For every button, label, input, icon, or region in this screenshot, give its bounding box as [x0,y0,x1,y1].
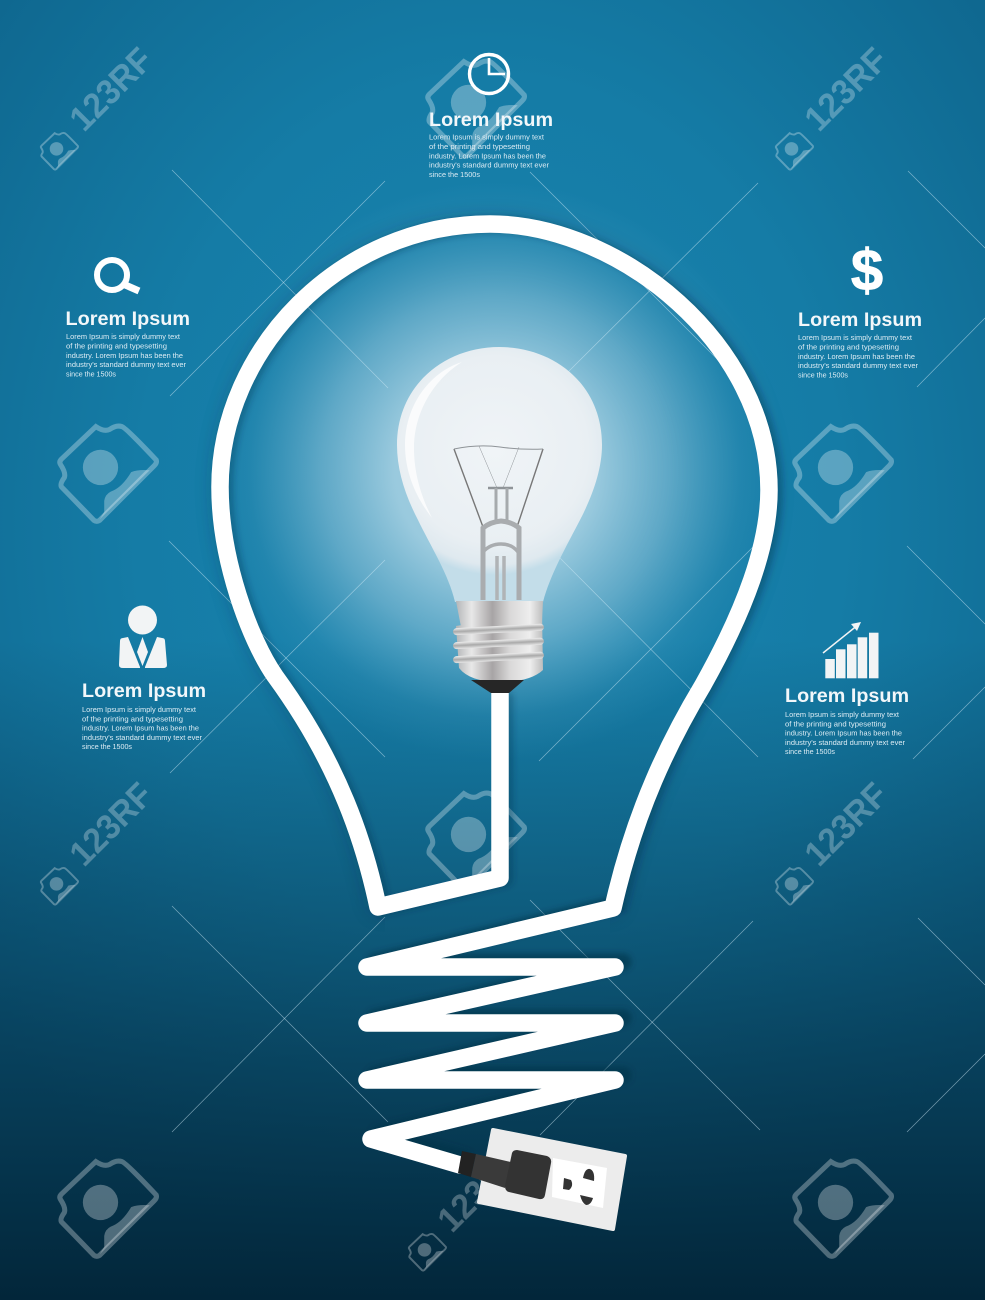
block: left magnifier: of the printing and typesetting [66,342,167,350]
plug body [471,1154,515,1188]
glass envelope [397,347,602,602]
screw base [453,601,544,682]
block: left person: Lorem Ipsum is simply dummy text [82,705,197,714]
block: left magnifier [66,260,190,378]
block: right chart [785,622,909,756]
block: right chart: Lorem Ipsum is simply dummy text [785,710,900,719]
block: top clock [429,54,553,179]
glass light bulb [397,347,602,693]
block: right chart: industry's standard dummy text ever [785,738,905,747]
plug head [505,1150,551,1199]
block: top clock: of the printing and typesetting [429,142,530,151]
block: right dollar: industry. Lorem Ipsum has been the [798,352,915,361]
block: left person: industry's standard dummy text ever [82,733,202,742]
block: right chart: of the printing and typesetting [785,719,886,728]
block: left person [82,606,206,751]
watermark: 123RF logos: 123RF [430,1141,528,1240]
block: right dollar: of the printing and typesetting [798,342,899,352]
block: right dollar: since the 1500s [798,370,848,380]
watermark: large stamps [60,61,891,1256]
icon: clock [470,54,508,94]
socket holes [563,1169,594,1205]
icon: business person [119,606,167,668]
block: left person: Lorem Ipsum [82,680,206,702]
glass highlight [405,362,462,518]
block: left magnifier: industry. Lorem Ipsum has been the [66,351,183,360]
block: left person: since the 1500s [82,742,132,751]
glow behind bulb [205,180,785,760]
socket plate [479,1130,625,1229]
block: left magnifier: Lorem Ipsum is simply dummy text [66,332,181,341]
block: top clock: Lorem Ipsum is simply dummy text [429,132,545,142]
block: right dollar: Lorem Ipsum [798,309,922,331]
block: right dollar [798,238,922,380]
block: left magnifier: Lorem Ipsum [66,308,190,330]
block: left magnifier: industry's standard dummy text ever [66,360,186,369]
block: top clock: industry's standard dummy text ever [429,161,549,170]
icon: magnifier [97,260,139,291]
wire shadow [220,224,774,1160]
black contact [471,680,524,693]
block: right chart: since the 1500s [785,747,835,756]
watermark: 123RF logos: 123RF [62,775,160,874]
watermark: 123RF logos: 123RF [797,40,895,139]
block: left magnifier: since the 1500s [66,370,116,378]
light bulb shaped wire [220,224,769,1165]
plug cord boot [458,1151,476,1177]
block: left person: industry. Lorem Ipsum has been the [82,724,199,732]
icon: growth bar chart [823,622,878,678]
block: right chart: Lorem Ipsum [785,685,909,707]
watermark: 123RF logos: 123RF [62,40,160,139]
block: top clock: since the 1500s [429,170,480,179]
block: right dollar: industry's standard dummy text ever [798,361,918,370]
block: top clock: industry. Lorem Ipsum has been the [429,151,546,160]
socket face [552,1158,607,1208]
block: right chart: industry. Lorem Ipsum has been the [785,728,902,738]
icon: dollar: $ [851,238,883,303]
block: right dollar: Lorem Ipsum is simply dummy text [798,333,913,342]
block: left person: of the printing and typesetting [82,714,183,723]
power socket and plug [458,1130,625,1229]
watermark: 123RF logos: 123RF [797,775,895,874]
block: top clock: Lorem Ipsum [429,109,553,131]
filament and stem [454,446,543,600]
